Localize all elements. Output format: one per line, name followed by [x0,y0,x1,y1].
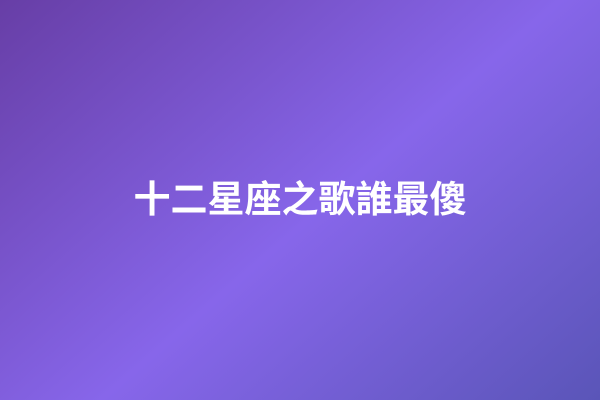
title: 十二星座之歌誰最傻 [134,179,466,220]
